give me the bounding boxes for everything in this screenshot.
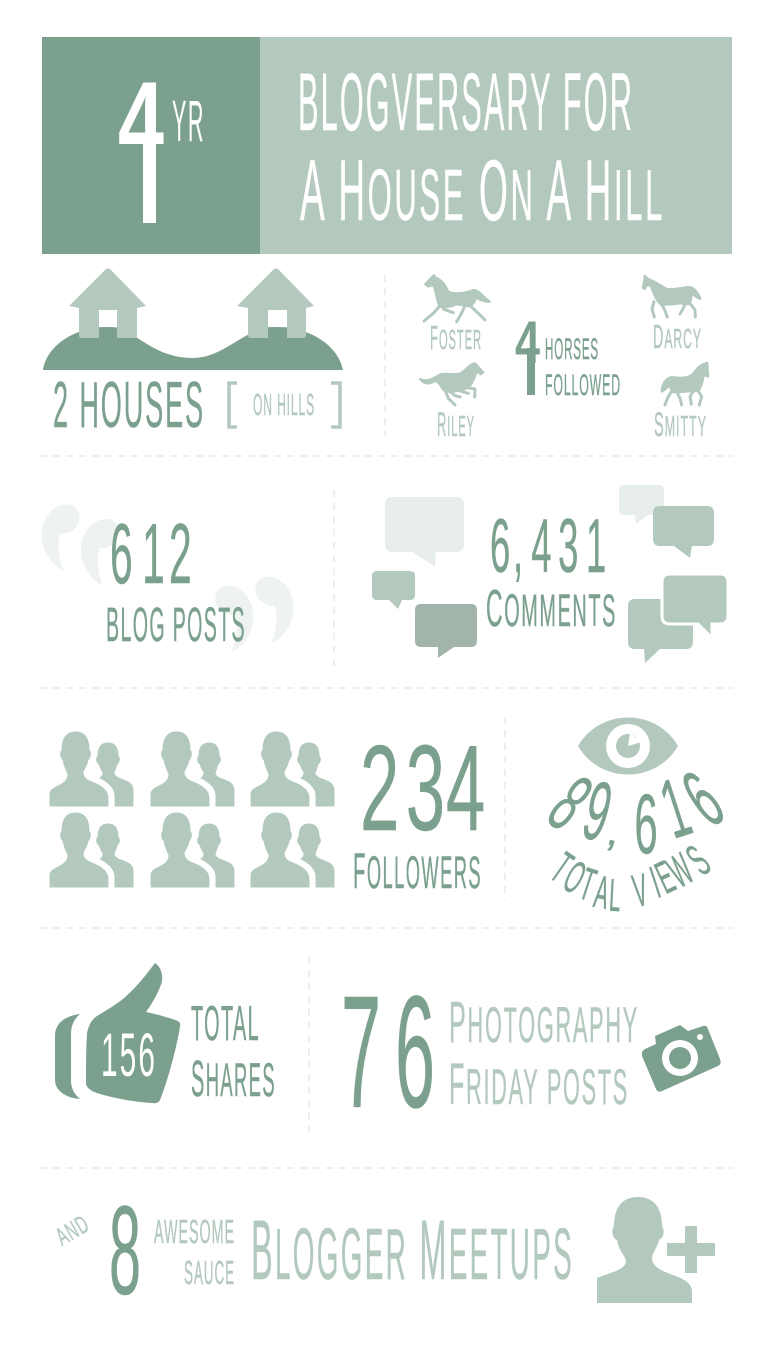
dividers (40, 275, 732, 1168)
text: FOLLOWERS (353, 843, 482, 899)
text: FOLLOWED (545, 369, 621, 402)
text: COMMENTS (486, 580, 617, 638)
icon: horse Foster (424, 275, 490, 322)
title line 2: A HOUSE ON A HILL (300, 143, 665, 239)
89,616 curved count: 9 (574, 764, 621, 860)
total views curved label (542, 836, 720, 922)
total views curved label: A (591, 866, 613, 919)
total views curved label: T (542, 843, 582, 892)
89,616 curved count: 1 (650, 761, 701, 857)
text: RILEY (437, 406, 475, 444)
89,616 curved count (532, 755, 740, 872)
on hills bracket note: ON HILLS (253, 387, 315, 422)
big number 4: 4 (118, 59, 164, 184)
total views curved label: L (608, 869, 622, 922)
and label: AND (51, 1210, 94, 1251)
text: SMITTY (654, 406, 707, 444)
icon: thumbs up (55, 963, 180, 1103)
text: AWESOME (154, 1213, 235, 1250)
text: TOTAL (191, 997, 260, 1051)
89,616 curved count: 8 (532, 760, 608, 848)
text: 8 (109, 1180, 141, 1321)
76 count: 76 (341, 964, 440, 1142)
total views curved label: W (659, 843, 702, 898)
text: 156 (101, 1021, 157, 1089)
total views curved label: I (644, 857, 666, 908)
89,616 curved count: , (603, 806, 627, 856)
icon: speech bubbles right (619, 485, 728, 663)
total views curved label: T (574, 858, 602, 911)
234 count: 234 (360, 721, 490, 857)
icon: horse Smitty (662, 363, 708, 405)
text: SHARES (191, 1050, 276, 1107)
total views curved label: O (556, 851, 594, 904)
icon: eye (578, 718, 678, 774)
icon: horse Darcy (643, 276, 701, 317)
icon: follower silhouettes (50, 732, 334, 887)
header banner: YR (172, 89, 205, 154)
89,616 curved count: 6 (634, 778, 658, 872)
text: FOSTER (430, 319, 482, 356)
text: BLOG POSTS (106, 599, 246, 652)
icon: horse Riley (420, 363, 483, 405)
4 horses followed stat: 4 (515, 309, 540, 376)
total views curved label: S (677, 836, 720, 885)
decorative quote marks (42, 504, 293, 652)
text: 2 HOUSES (53, 368, 205, 441)
4 horses followed stat: HORSES (545, 333, 599, 366)
icon: camera (642, 1025, 721, 1092)
big number 4 (118, 59, 164, 223)
4 horses followed stat (515, 309, 621, 402)
89,616 curved count: 6 (667, 755, 740, 845)
6,431 count: 6,431 (490, 503, 609, 589)
total views curved label: E (648, 851, 682, 904)
icon: add person (597, 1197, 715, 1303)
612 blog posts count: 612 (110, 508, 195, 602)
text: DARCY (653, 318, 702, 355)
text: SAUCE (184, 1254, 235, 1291)
header banner (42, 37, 732, 254)
blogger meetups label: BLOGGER MEETUPS (251, 1203, 574, 1297)
on hills bracket note (229, 383, 340, 427)
icon: speech bubbles left (372, 497, 477, 658)
icon: two houses on hills (43, 268, 343, 370)
total views curved label: V (629, 864, 651, 917)
